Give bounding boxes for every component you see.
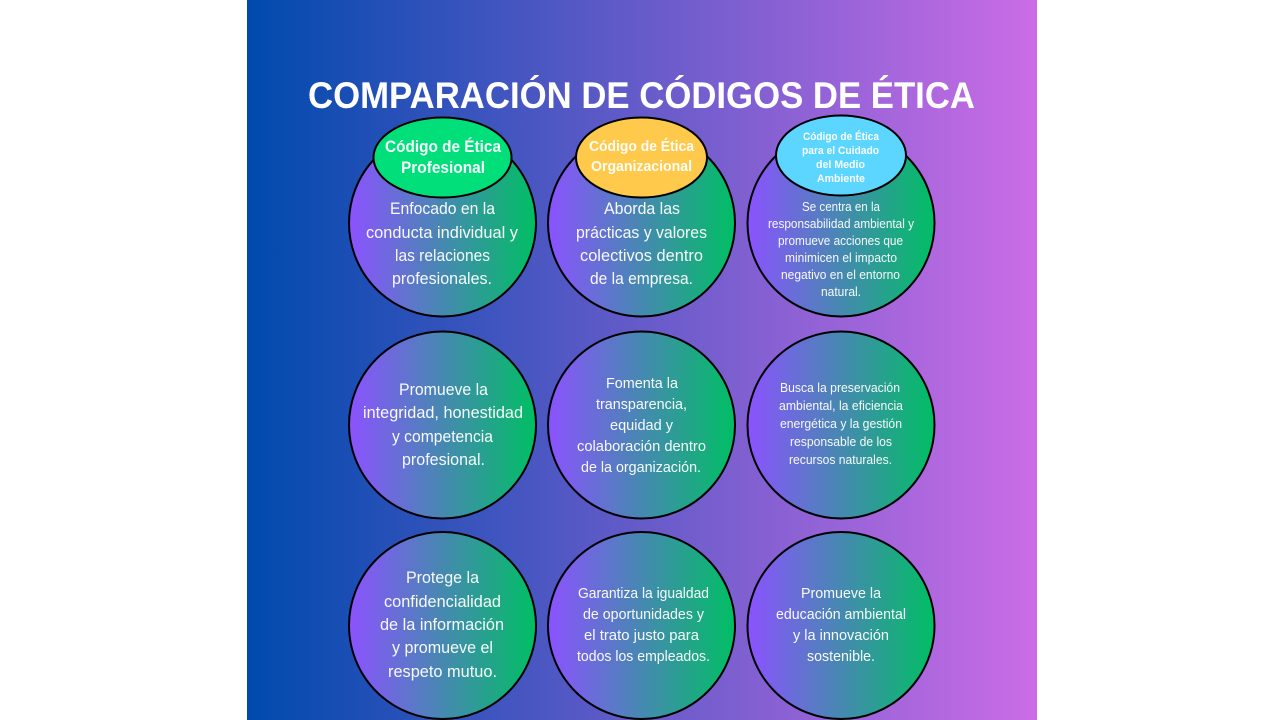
column 2 row 1 circle: prácticas y valores <box>576 224 707 242</box>
header oval: Código de Ética Profesional: Código de Ética <box>385 137 502 156</box>
column 2 row 2 circle: transparencia, <box>596 397 687 413</box>
header oval: Código de Ética Organizacional <box>576 118 707 198</box>
column 3 row 1 circle: negativo en el entorno <box>781 268 900 282</box>
column 2 row 2 circle: equidad y <box>610 418 674 434</box>
column 1 row 2 circle <box>349 332 536 518</box>
column 2 row 2 circle: colaboración dentro <box>577 439 706 455</box>
column 2 row 1 circle: de la empresa. <box>590 270 693 288</box>
header oval: Código de Ética Profesional: Profesional <box>401 159 485 177</box>
column 2 row 3 circle: el trato justo para <box>584 628 700 644</box>
column 2 row 2 circle: Fomenta la <box>606 376 679 392</box>
header oval: Código de Ética Profesional <box>374 118 512 198</box>
header oval: Código de Ética Organizacional: Código de Ética <box>589 138 695 155</box>
column 3 row 1 circle <box>748 130 934 316</box>
column 1 row 3 circle: y promueve el <box>392 639 493 657</box>
header oval: Código de Ética para el Cuidado del Medio Ambiente: del Medio <box>816 159 865 171</box>
header oval: Código de Ética para el Cuidado del Medio Ambiente: Código de Ética <box>803 130 880 143</box>
column 3 row 3 circle: Promueve la <box>801 586 882 602</box>
column 3 row 2 circle: Busca la preservación <box>780 381 900 395</box>
column 3 row 2 circle: energética y la gestión <box>780 417 902 431</box>
column 1 row 1 circle <box>349 130 536 316</box>
column 3 row 2 circle: responsable de los <box>790 435 892 449</box>
column 3 row 3 circle <box>748 532 934 719</box>
column 3 row 3 circle: y la innovación <box>793 628 889 644</box>
column 1 row 1 circle: Enfocado en la <box>390 200 496 218</box>
column 1 row 2 circle: Promueve la <box>399 381 489 399</box>
column 3 row 2 circle <box>748 332 934 518</box>
column 3 row 2 circle: recursos naturales. <box>789 453 892 467</box>
column 3 row 1 circle: Se centra en la <box>802 200 880 214</box>
title: COMPARACIÓN DE CÓDIGOS DE ÉTICA <box>308 74 975 116</box>
column 1 row 3 circle: confidencialidad <box>384 593 501 611</box>
gradient background panel <box>247 0 1037 720</box>
column 1 row 3 circle: respeto mutuo. <box>388 663 497 681</box>
column 1 row 2 circle: y competencia <box>392 428 494 446</box>
column 2 row 2 circle <box>548 332 735 518</box>
column 2 row 3 circle: todos los empleados. <box>577 649 710 665</box>
column 3 row 1 circle: minimicen el impacto <box>785 251 897 265</box>
column 1 row 3 circle: Protege la <box>406 569 480 587</box>
header oval: Código de Ética para el Cuidado del Medio Ambiente: Ambiente <box>817 173 865 185</box>
column 2 row 3 circle: Garantiza la igualdad <box>578 586 709 602</box>
column 2 row 3 circle: de oportunidades y <box>583 607 705 623</box>
header oval: Código de Ética para el Cuidado del Medio Ambiente: para el Cuidado <box>802 145 879 157</box>
column 1 row 3 circle: de la información <box>380 616 504 634</box>
column 1 row 1 circle: las relaciones <box>395 247 490 265</box>
column 2 row 1 circle: colectivos dentro <box>580 247 703 265</box>
column 2 row 1 circle <box>548 130 735 316</box>
column 3 row 2 circle: ambiental, la eficiencia <box>779 399 903 413</box>
column 3 row 1 circle: promueve acciones que <box>778 234 903 248</box>
column 2 row 2 circle: de la organización. <box>581 460 701 476</box>
column 2 row 1 circle: Aborda las <box>604 200 680 218</box>
column 3 row 3 circle: educación ambiental <box>776 607 906 623</box>
column 3 row 1 circle: responsabilidad ambiental y <box>768 217 915 231</box>
header oval: Código de Ética para el Cuidado del Medio Ambiente <box>776 116 906 196</box>
column 1 row 2 circle: integridad, honestidad <box>363 404 523 422</box>
column 1 row 1 circle: conducta individual y <box>366 224 519 242</box>
column 1 row 1 circle: profesionales. <box>392 270 492 288</box>
column 1 row 3 circle <box>349 532 536 719</box>
column 2 row 3 circle <box>548 532 735 719</box>
column 3 row 3 circle: sostenible. <box>807 649 875 665</box>
header oval: Código de Ética Organizacional: Organizacional <box>591 159 692 175</box>
column 1 row 2 circle: profesional. <box>402 451 485 469</box>
column 3 row 1 circle: natural. <box>821 285 861 299</box>
